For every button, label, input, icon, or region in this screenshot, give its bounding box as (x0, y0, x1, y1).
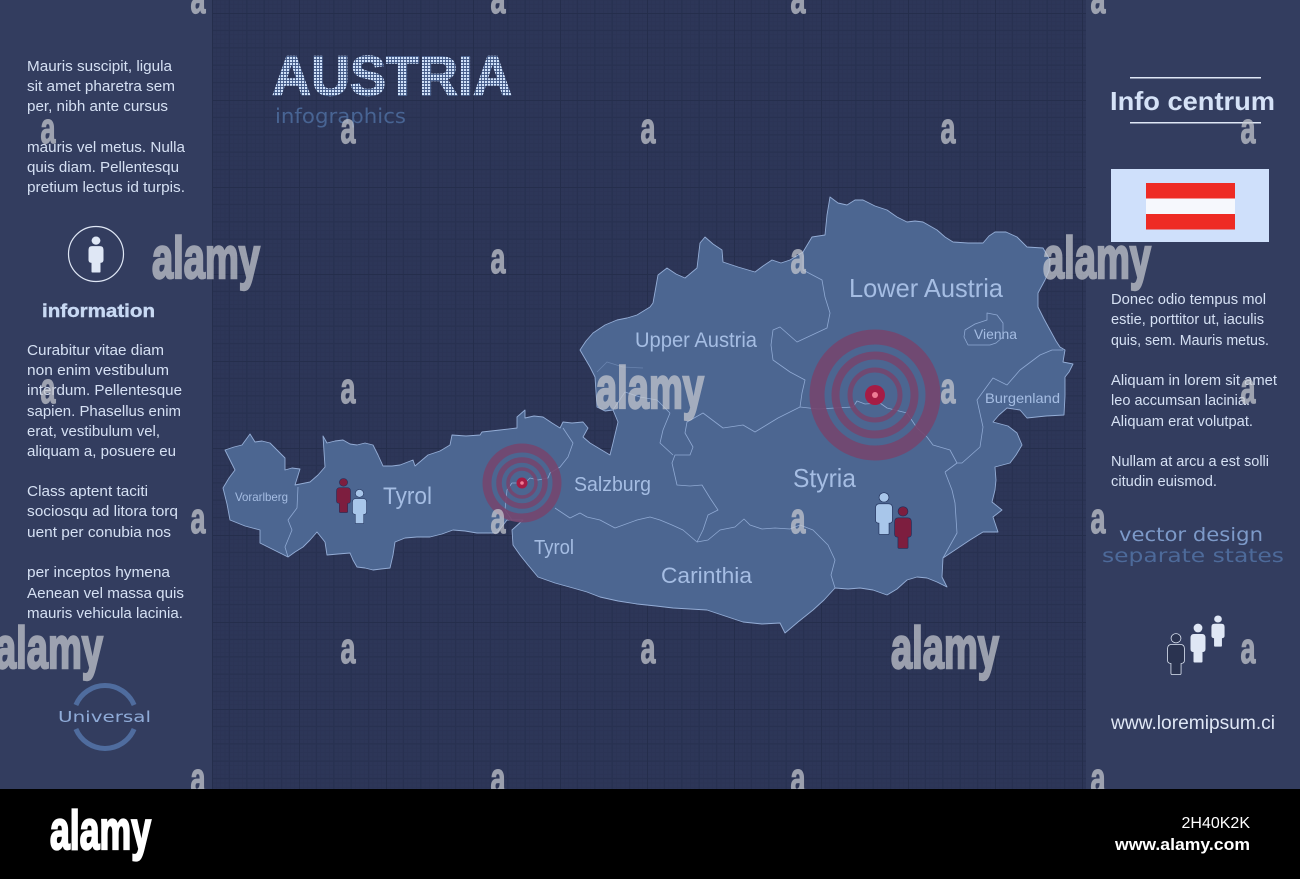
small watermark letters: a (340, 624, 356, 673)
state labels: Lower Austria (849, 273, 1004, 303)
small watermark letters: a (940, 364, 956, 413)
small watermark letters: a (190, 494, 206, 543)
left text block: body: uent per conubia nos (27, 524, 171, 541)
flag of Austria (1111, 169, 1269, 242)
right text block: citudin euismod. (1111, 473, 1217, 490)
target rings: Tyrol (487, 448, 557, 518)
small watermark letters: a (40, 104, 56, 153)
right text block: Aliquam in lorem sit amet (1111, 372, 1278, 389)
small watermark letters: a (790, 234, 806, 283)
state labels: Burgenland (985, 390, 1060, 406)
left text block: body: erat, vestibulum vel, (27, 423, 160, 440)
left text block: body (27, 342, 184, 622)
small watermark letters: a (1240, 104, 1256, 153)
left text block: intro: sit amet pharetra sem (27, 78, 175, 95)
left text block: body: aliquam a, posuere eu (27, 443, 176, 460)
small watermark letters: a (640, 624, 656, 673)
left text block: body: non enim vestibulum (27, 362, 169, 379)
left text block: intro (27, 58, 186, 196)
website: www.loremipsum.ci (1110, 713, 1275, 734)
left text block: body: Class aptent taciti (27, 483, 148, 500)
alamy logo: alamy (50, 799, 151, 861)
left text block: intro: pretium lectus id turpis. (27, 179, 185, 196)
map of Austria (223, 197, 1073, 633)
small watermark letters: a (1240, 364, 1256, 413)
small watermark letters: a (790, 754, 806, 803)
left text block: body: per inceptos hymena (27, 564, 171, 581)
small watermark letters: a (340, 364, 356, 413)
large watermark logos: alamy (596, 356, 704, 421)
state labels: Salzburg (574, 474, 651, 496)
right text block: quis, sem. Mauris metus. (1111, 332, 1269, 349)
left text block: body: sapien. Phasellus enim (27, 403, 181, 420)
title: AUSTRIA (272, 44, 512, 107)
small watermark letters: a (1090, 754, 1106, 803)
state labels (235, 273, 1060, 588)
left text block: intro: Mauris suscipit, ligula (27, 58, 173, 75)
state labels: Styria (793, 463, 857, 493)
large watermark logos: alamy (152, 226, 260, 291)
small watermark letters: a (490, 234, 506, 283)
right text block: leo accumsan lacinia. (1111, 392, 1250, 409)
large watermark logos: alamy (1043, 226, 1151, 291)
people icons: Tyrol (336, 479, 367, 524)
right text block: Donec odio tempus mol (1111, 291, 1266, 308)
subtitle: infographics (275, 104, 406, 128)
left text block: intro: mauris vel metus. Nulla (27, 139, 186, 156)
small watermark letters: a (490, 494, 506, 543)
state labels: Tyrol (534, 537, 574, 559)
heading: Info centrum: Info centrum (1110, 86, 1275, 116)
state borders (285, 252, 1063, 588)
target rings: Lower Austria (817, 337, 933, 453)
small watermark letters: a (1240, 624, 1256, 673)
small watermark letters: a (490, 754, 506, 803)
right text block (1111, 291, 1278, 490)
small watermark letters: a (340, 104, 356, 153)
state labels: Carinthia (661, 563, 753, 588)
left text block: intro: per, nibh ante cursus (27, 98, 168, 115)
small watermark letters: a (1090, 494, 1106, 543)
left text block: body: sociosqu ad litora torq (27, 503, 178, 520)
heading: information: information (42, 301, 155, 321)
left text block: body: mauris vehicula lacinia. (27, 605, 183, 622)
bottom credit bar (0, 789, 1300, 879)
small watermark letters: a (940, 104, 956, 153)
tagline: separate states: separate states (1102, 545, 1284, 567)
tagline: vector design: vector design (1119, 524, 1263, 546)
icon: person in circle (68, 226, 124, 282)
large watermark logos: alamy (891, 616, 999, 681)
state labels: Tyrol (383, 483, 432, 510)
state labels: Vienna (974, 326, 1017, 342)
source url: www.alamy.com (1114, 835, 1250, 854)
small watermark letters: a (790, 494, 806, 543)
people icons: Styria (876, 493, 911, 548)
icon: three people (1168, 615, 1225, 674)
logo: Universal: Universal (58, 708, 151, 726)
logo: Universal (58, 686, 151, 748)
image id: 2H40K2K (1182, 815, 1250, 832)
right text block: estie, porttitor ut, iaculis (1111, 311, 1264, 328)
blueprint grid background (212, 0, 1086, 790)
left text block: intro: quis diam. Pellentesqu (27, 159, 179, 176)
small watermark letters: a (640, 104, 656, 153)
left text block: body: Curabitur vitae diam (27, 342, 164, 359)
state labels: Vorarlberg (235, 490, 288, 504)
right text block: Aliquam erat volutpat. (1111, 413, 1253, 430)
country shape (223, 197, 1073, 633)
large watermark logos (0, 226, 1151, 681)
small watermark letters: a (40, 364, 56, 413)
state labels: Upper Austria (635, 329, 757, 352)
left text block: body: interdum. Pellentesque (27, 382, 182, 399)
right text block: Nullam at arcu a est solli (1111, 453, 1269, 470)
left text block: body: Aenean vel massa quis (27, 585, 184, 602)
small watermark letters: a (190, 754, 206, 803)
